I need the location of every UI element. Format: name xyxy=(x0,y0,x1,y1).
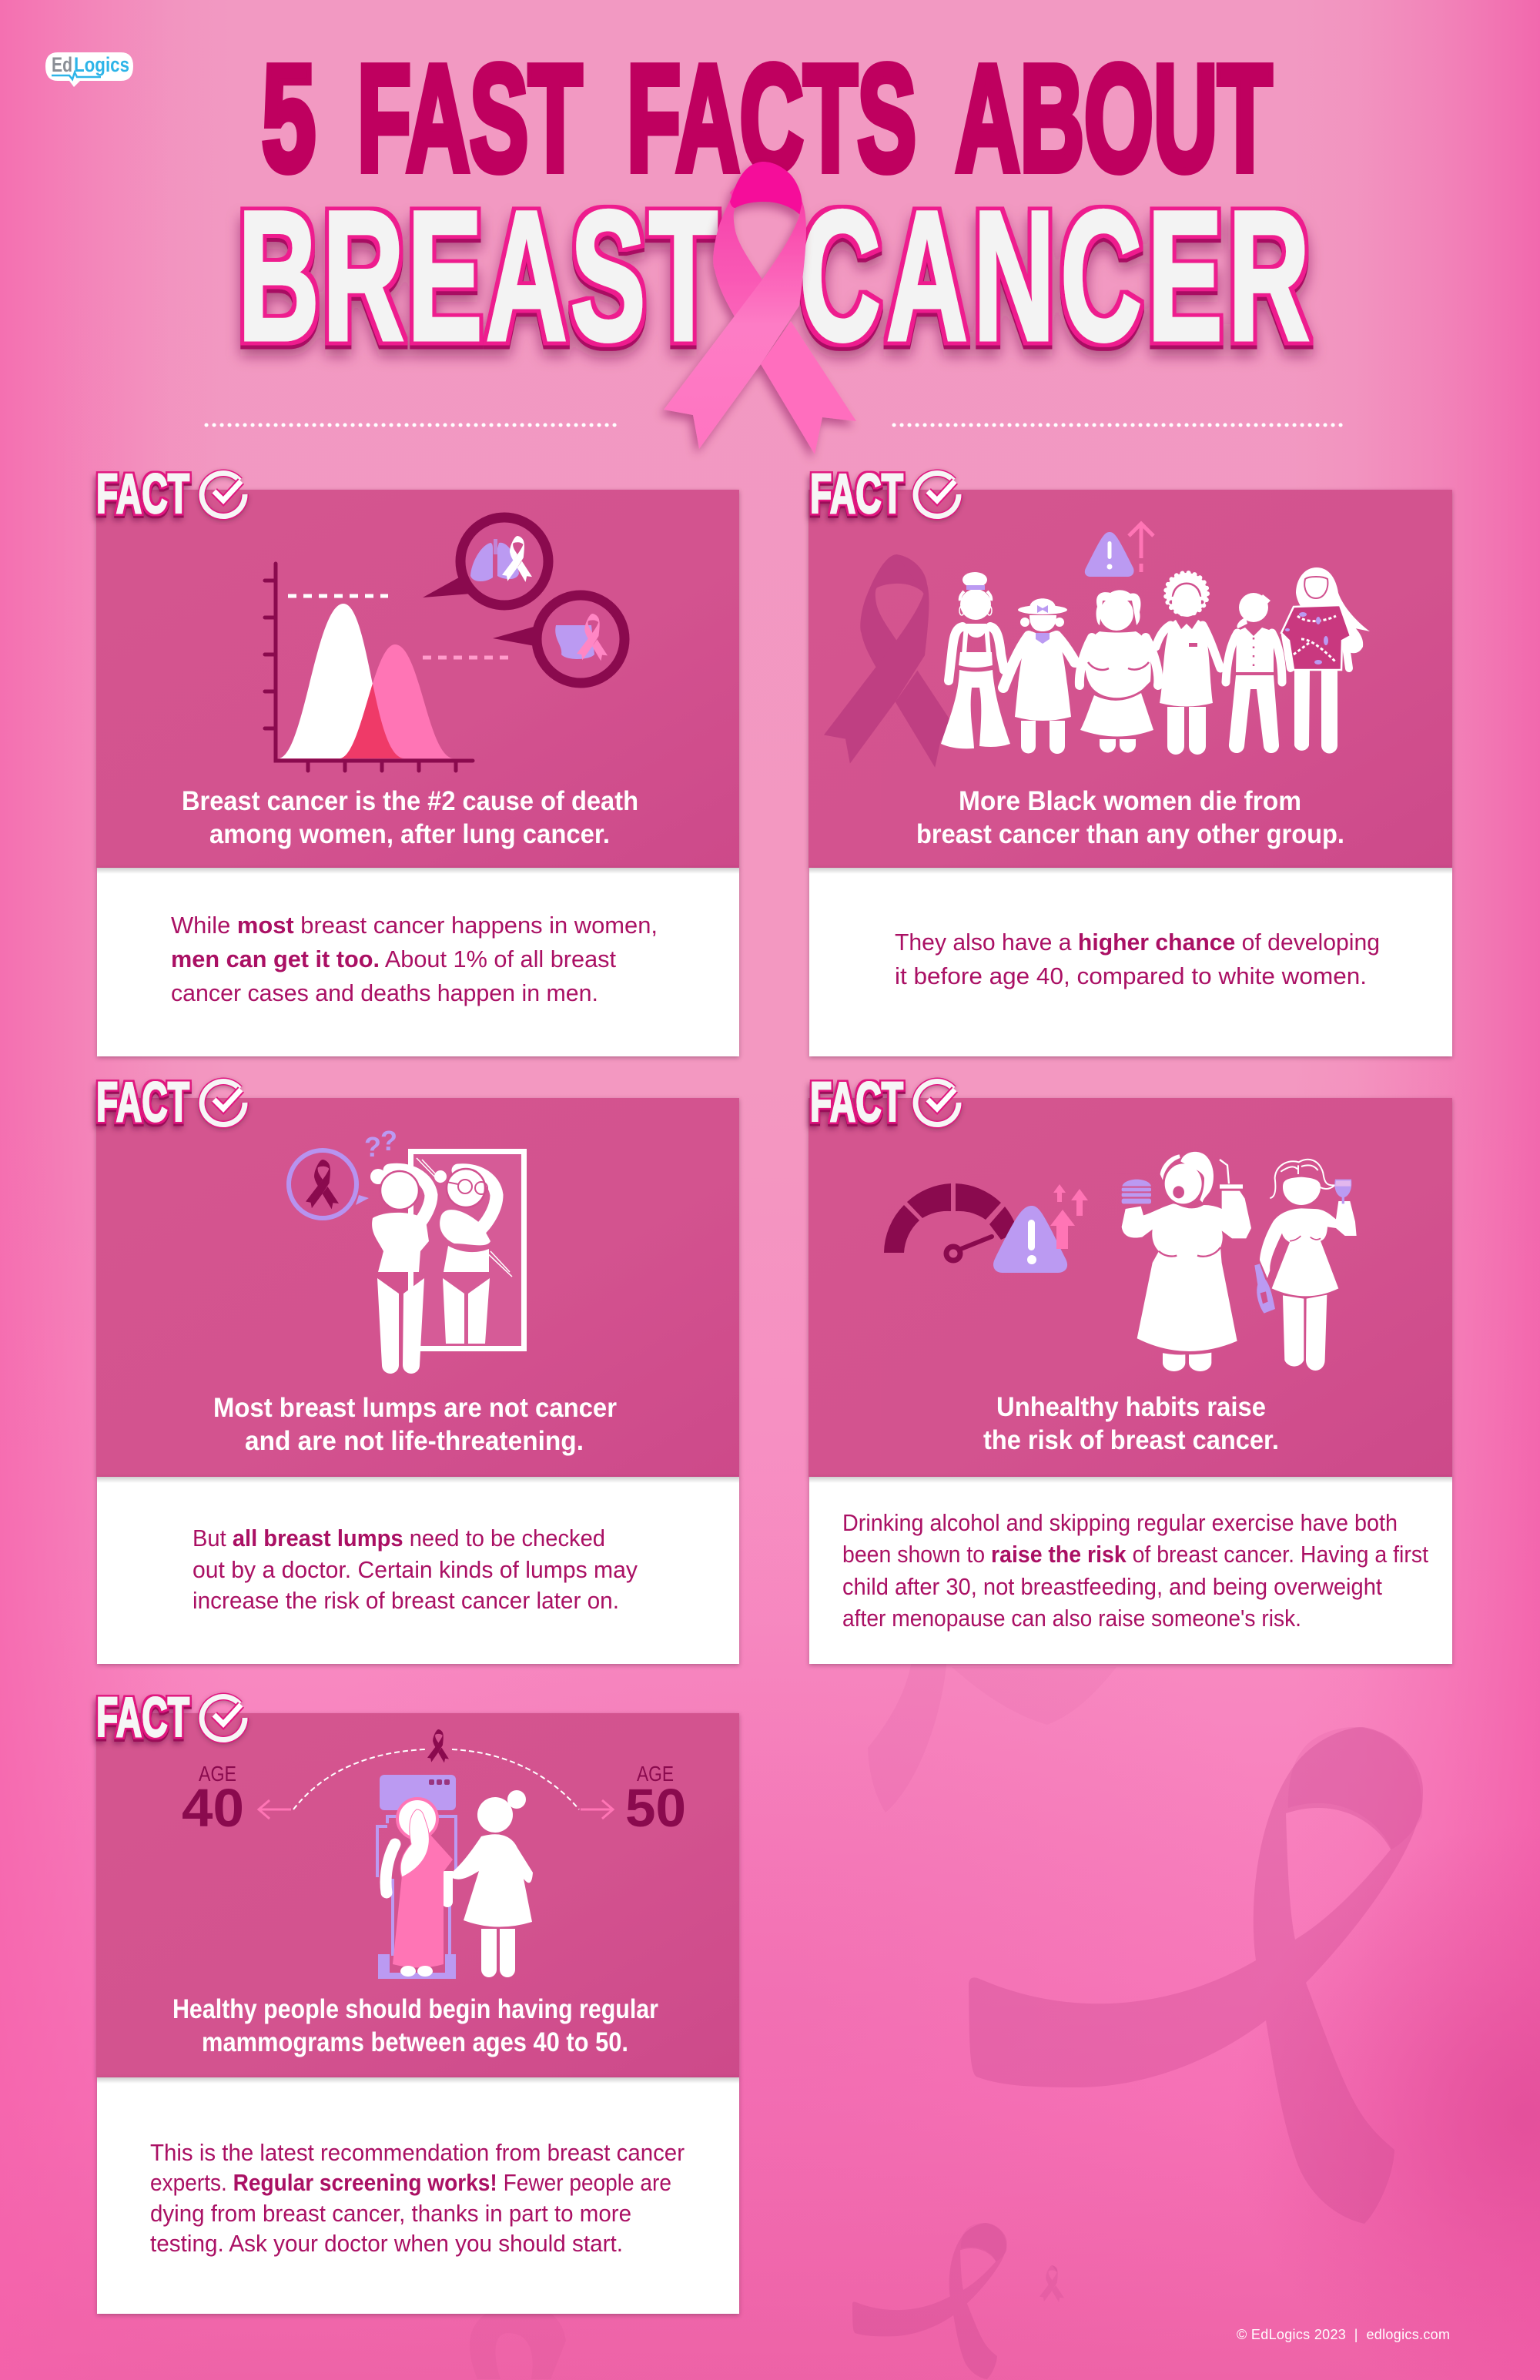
group of six women xyxy=(941,567,1370,755)
panel 2 image area xyxy=(808,490,1452,868)
woman 6 xyxy=(1281,567,1370,753)
logo: EdLogics xyxy=(45,52,133,87)
heading: and are not life-threatening. xyxy=(245,1426,584,1456)
title line 1: ABOUT xyxy=(956,34,1272,203)
panel 1: death cause xyxy=(96,490,739,1056)
body text xyxy=(842,1509,1428,1632)
woman 5 xyxy=(1226,593,1282,753)
heading: Breast cancer is the #2 cause of death xyxy=(182,786,638,816)
body text xyxy=(895,929,1380,989)
chart: overlapping bell curves xyxy=(265,564,508,771)
woman 2 xyxy=(1003,598,1075,754)
heading xyxy=(983,1392,1279,1455)
mirror glare xyxy=(417,1158,512,1277)
age 40 label: AGE xyxy=(199,1762,236,1786)
logo: EdLogics: Logics xyxy=(74,53,129,76)
woman at mirror xyxy=(370,1169,431,1374)
icon: warning triangle xyxy=(993,1206,1067,1273)
heading: Unhealthy habits raise xyxy=(996,1392,1266,1422)
title line 2 xyxy=(238,173,1315,380)
icon: small ribbon xyxy=(427,1729,449,1762)
age 50 label: 50 xyxy=(625,1778,686,1838)
body text: it before age 40, compared to white women. xyxy=(895,962,1367,989)
fact badge 5: FACT xyxy=(96,1687,189,1749)
fact badge 2: FACT xyxy=(810,464,903,525)
question marks xyxy=(364,1125,397,1163)
body text xyxy=(192,1525,638,1614)
arrow to age 50 xyxy=(581,1800,613,1819)
body text: Drinking alcohol and skipping regular exercise have both xyxy=(842,1509,1398,1536)
heading: the risk of breast cancer. xyxy=(983,1425,1279,1455)
woman 4 xyxy=(1156,573,1220,755)
reflection xyxy=(434,1169,497,1344)
age 50 label: AGE xyxy=(637,1762,674,1786)
body text: This is the latest recommendation from breast cancer xyxy=(150,2139,685,2166)
body text: increase the risk of breast cancer later on. xyxy=(192,1587,619,1614)
panel 2 white text card xyxy=(809,868,1452,1056)
body text: But all breast lumps need to be checked xyxy=(192,1525,605,1552)
woman with wine xyxy=(1254,1160,1357,1371)
heading xyxy=(916,786,1344,849)
body text: been shown to raise the risk of breast cancer. Having a first xyxy=(842,1541,1428,1568)
title line 1 xyxy=(262,34,1272,203)
panel 5: mammograms xyxy=(96,1713,739,2314)
panel 5 image area xyxy=(96,1713,739,2077)
body text: out by a doctor. Certain kinds of lumps may xyxy=(192,1556,638,1583)
mirror frame xyxy=(411,1152,524,1349)
patient xyxy=(386,1799,453,1977)
question marks: ? xyxy=(380,1125,397,1157)
icon: lung cancer bubble xyxy=(423,517,548,605)
woman with burger xyxy=(1122,1152,1251,1371)
woman 1 xyxy=(941,572,1010,748)
woman 3 xyxy=(1080,590,1158,753)
icon: up arrow xyxy=(1129,524,1153,572)
panel 1 white text card xyxy=(97,868,739,1056)
heading xyxy=(213,1393,617,1456)
logo: EdLogics: Ed xyxy=(52,53,72,76)
title line 1: FACTS xyxy=(627,34,916,203)
age 40 label: 40 xyxy=(182,1778,244,1838)
body text xyxy=(171,912,658,1006)
body text: after menopause can also raise someone's risk. xyxy=(842,1605,1301,1632)
watermark ribbon xyxy=(824,554,966,768)
title line 1: 5 xyxy=(262,34,316,203)
icon: ribbon speech bubble xyxy=(289,1150,369,1218)
body text: testing. Ask your doctor when you should start. xyxy=(150,2230,623,2257)
title ribbon xyxy=(664,162,856,454)
body text: dying from breast cancer, thanks in part to more xyxy=(150,2200,631,2227)
dotted divider left xyxy=(206,423,621,427)
heading: breast cancer than any other group. xyxy=(916,819,1344,849)
body text xyxy=(150,2139,685,2257)
panel 5 white text card xyxy=(97,2077,739,2314)
body text: child after 30, not breastfeeding, and being overweight xyxy=(842,1573,1382,1600)
title line 2: BREAST xyxy=(238,173,721,380)
heading: Healthy people should begin having regular xyxy=(172,1994,658,2024)
body text: While most breast cancer happens in women, xyxy=(171,912,658,939)
body text: men can get it too. About 1% of all breast xyxy=(171,946,616,972)
panel 4 white text card xyxy=(809,1477,1452,1664)
nurse xyxy=(448,1790,533,1977)
title line 2: CANCER xyxy=(799,173,1315,380)
body text: They also have a higher chance of developing xyxy=(895,929,1380,956)
icon: warning triangle xyxy=(1085,532,1134,577)
heading: Most breast lumps are not cancer xyxy=(213,1393,617,1423)
panel 4 image area xyxy=(808,1098,1452,1477)
panel 3 image area xyxy=(96,1098,739,1477)
heading: among women, after lung cancer. xyxy=(209,819,610,849)
background ribbons watermark xyxy=(470,1655,1423,2379)
panel 2: black women xyxy=(808,490,1452,1056)
arrow to age 40 xyxy=(259,1800,291,1819)
body text: cancer cases and deaths happen in men. xyxy=(171,979,598,1006)
fact badge 4: FACT xyxy=(810,1072,903,1133)
icon: breast cancer bubble xyxy=(493,595,624,683)
body text: experts. Regular screening works! Fewer people are xyxy=(150,2169,671,2196)
icon: rising arrows xyxy=(1050,1184,1088,1249)
footer credit: © EdLogics 2023 | edlogics.com xyxy=(1237,2327,1450,2342)
panel 4: unhealthy habits xyxy=(808,1098,1452,1664)
panel 1 image area xyxy=(96,490,739,868)
heading: More Black women die from xyxy=(959,786,1301,816)
heading xyxy=(172,1994,658,2057)
icon: risk gauge xyxy=(884,1183,1018,1260)
title line 1: FAST xyxy=(357,34,582,203)
dashed arc xyxy=(293,1749,579,1809)
panel 3 white text card xyxy=(97,1477,739,1664)
panel 3: breast lumps xyxy=(96,1098,739,1664)
dotted divider right xyxy=(894,423,1348,427)
question marks: ? xyxy=(364,1131,381,1163)
heading xyxy=(182,786,638,849)
fact badge 1: FACT xyxy=(96,464,189,525)
mammogram machine xyxy=(377,1775,456,1979)
fact badge 3: FACT xyxy=(96,1072,189,1133)
heading: mammograms between ages 40 to 50. xyxy=(202,2027,628,2057)
